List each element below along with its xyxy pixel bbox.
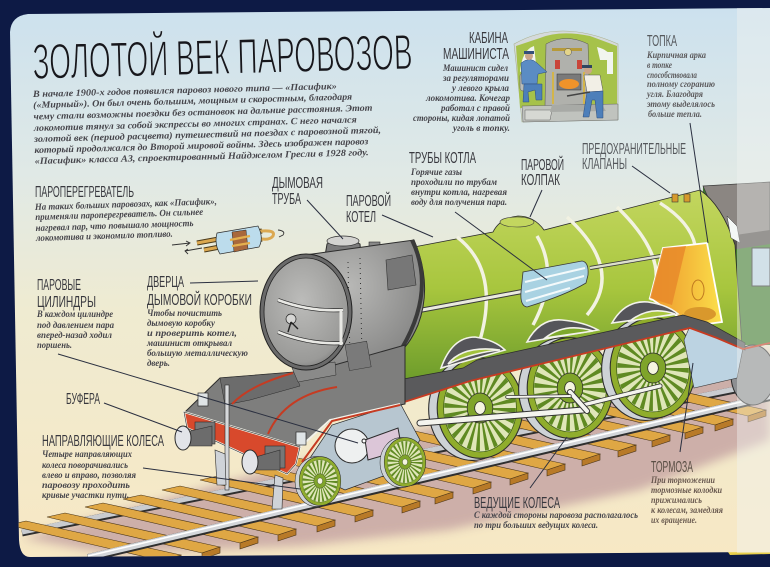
callout: brakes: прижимались: [651, 496, 703, 506]
label: chimney: [272, 175, 323, 208]
label: steam dome: [521, 155, 564, 189]
callout: firebox: ТОПКА: [647, 33, 677, 50]
intro text block: «Пасифик» класса А3, спроектированный Найджелом Гресли в 1928 году.: [35, 147, 369, 167]
callout: driver's cab: [413, 30, 510, 134]
callout: boiler tubes: [409, 150, 507, 208]
label: safety valves: КЛАПАНЫ: [582, 156, 627, 173]
callout: brakes: ТОРМОЗА: [651, 459, 693, 476]
callout: driving wheels: С каждой стороны паровоза располагалось: [474, 510, 639, 521]
label: safety valves: ПРЕДОХРАНИТЕЛЬНЫЕ: [582, 141, 686, 158]
intro text block: [32, 80, 382, 167]
icon: cab interior illustration: [514, 31, 618, 122]
label: safety valves: [582, 141, 686, 173]
callout: superheater: [34, 184, 218, 244]
callout: smokebox door: ДЫМОВОЙ КОРОБКИ: [147, 290, 252, 309]
callout: driver's cab: работал с правой: [440, 103, 510, 114]
translucent right page edge: [737, 8, 770, 553]
boiler tubes cutaway: [521, 261, 588, 307]
callout: firebox: больше тепла.: [648, 109, 702, 120]
callout: driver's cab: за регуляторами: [442, 74, 509, 84]
callout: leading wheels: [42, 433, 164, 501]
label: boiler: [346, 191, 391, 226]
callout: brakes: [650, 459, 723, 526]
callout: leading wheels: колеса поворачивались: [42, 461, 129, 471]
callout: smokebox door: дымовую коробку: [147, 318, 216, 329]
callout: steam cylinders: [36, 277, 114, 351]
intro text block: который продолжался до Второй мировой войны. Здесь изображен паровоз: [34, 136, 369, 156]
steam dome top: [500, 217, 534, 227]
buffers: [175, 426, 280, 474]
callout: leading wheels: НАПРАВЛЯЮЩИЕ КОЛЕСА: [42, 433, 164, 450]
intro text block: золотой век (период расцвета) путешествий на поездах с паровозной тягой,: [33, 125, 381, 145]
firebox cutaway: [650, 243, 722, 326]
chimney: [325, 236, 380, 256]
intro text block: («Мирный»). Он был очень большим, мощным и скоростным, благодаря: [33, 92, 352, 111]
callout: boiler tubes: воду для получения пара.: [411, 197, 507, 208]
label: boiler: КОТЕЛ: [346, 209, 376, 226]
label: boiler: ПАРОВОЙ: [346, 191, 391, 210]
intro text block: В начале 1900-х годов появился паровоз нового типа — «Пасифик»: [32, 81, 337, 100]
callout: driver's cab: уголь в топку.: [452, 124, 510, 134]
callout: boiler tubes: ТРУБЫ КОТЛА: [409, 150, 476, 167]
buffer beam: [184, 385, 300, 509]
pipes: [395, 255, 667, 315]
coupling rods: [420, 386, 660, 423]
boiler: [395, 190, 742, 386]
callout: brakes: тормозные колодки: [651, 485, 722, 496]
label: steam dome: КОЛПАК: [521, 172, 560, 189]
leader lines: [58, 123, 708, 489]
callout: smokebox door: машинист открывал: [146, 339, 232, 349]
back rail: [22, 382, 770, 533]
callout: driver's cab: Машинист сидел: [442, 63, 508, 74]
safety valves: [672, 194, 690, 202]
callout: superheater: локомотива и экономило топливо.: [35, 230, 173, 244]
callout: smokebox door: и проверить котел,: [147, 329, 237, 339]
small leading wheels: [295, 438, 426, 506]
callout: firebox: в топке: [647, 61, 673, 71]
intro text block: локомотив тянул за собой экспрессы во многих странах. С него начался: [33, 115, 357, 134]
callout: smokebox door: большую металлическую: [147, 348, 248, 359]
callout: superheater: применяли пароперегреватель. Он сильнее: [35, 208, 204, 223]
rear driving wheel group: [429, 318, 696, 460]
callout: leading wheels: кривые участки пути.: [42, 491, 129, 501]
smokebox: [298, 240, 425, 372]
callout: firebox: Кирпичная арка: [646, 51, 706, 61]
callout: firebox: угля. Благодаря: [646, 89, 703, 100]
ground ballast: [22, 350, 770, 554]
callout: brakes: При торможении: [650, 476, 715, 486]
rear frame: [684, 326, 743, 388]
callout: leading wheels: влево и вправо, позволяя: [42, 471, 136, 481]
callout: superheater: На таких больших паровозах, как «Пасифик»,: [34, 196, 217, 213]
callout: steam cylinders: В каждом цилиндре: [36, 309, 114, 320]
callout: driver's cab: локомотива. Кочегар: [425, 94, 510, 104]
label: chimney: ТРУБА: [272, 191, 301, 208]
callout: brakes: к колесам, замедляя: [651, 505, 723, 516]
callout: driving wheels: [474, 495, 639, 531]
intro text block: чему стали возможны поездки без остановок на дальние расстояния. Этот: [33, 103, 373, 122]
callout: steam cylinders: поршень.: [37, 341, 72, 351]
callout: firebox: полному сгоранию: [647, 80, 715, 90]
callout: steam cylinders: ПАРОВЫЕ: [37, 277, 81, 294]
callout: leading wheels: паровозу проходить: [42, 480, 131, 491]
callout: smokebox door: [146, 274, 252, 369]
lamps: [198, 393, 306, 445]
callout: firebox: [646, 33, 716, 120]
callout: driver's cab: МАШИНИСТА: [443, 46, 509, 63]
callout: smokebox door: дверь.: [147, 358, 170, 369]
label: steam dome: ПАРОВОЙ: [521, 155, 564, 174]
callout: driver's cab: КАБИНА: [469, 30, 508, 47]
platform: [185, 341, 405, 462]
callout: driving wheels: по три больших ведущих колеса.: [474, 520, 598, 531]
icon: superheater: [172, 226, 284, 254]
cab and tender: [700, 182, 770, 405]
firebox window: [727, 216, 740, 243]
smokebox door: [260, 254, 352, 370]
callout: driving wheels: ВЕДУЩИЕ КОЛЕСА: [474, 495, 560, 512]
callout: smokebox door: Чтобы почистить: [147, 308, 223, 319]
callout: boiler tubes: внутри котла, нагревая: [411, 188, 507, 198]
callout: driver's cab: у левого крыла: [451, 84, 509, 94]
callout: brakes: их вращение.: [651, 516, 697, 526]
title: ЗОЛОТОЙ ВЕК ПАРОВОЗОВ: [32, 23, 413, 90]
cylinder and bogie: [302, 403, 420, 490]
figure: driver: [520, 51, 547, 102]
callout: firebox: этому выделялось: [646, 99, 716, 110]
boiler bands: [457, 203, 695, 340]
callout: superheater: нагревал пар, что повышало мощность: [35, 219, 194, 234]
label: chimney: ДЫМОВАЯ: [272, 175, 323, 192]
label: buffers: БУФЕРА: [66, 391, 100, 408]
callout: smokebox door: ДВЕРЦА: [147, 274, 184, 291]
front rail: [88, 395, 770, 558]
callout: steam cylinders: ЦИЛИНДРЫ: [37, 294, 96, 311]
running plate: [398, 315, 770, 404]
sleepers: [18, 393, 767, 556]
callout: steam cylinders: вперед-назад ходил: [37, 330, 112, 341]
callout: firebox: способствовала: [647, 70, 697, 81]
splashers: [441, 302, 678, 368]
callout: boiler tubes: Горячие газы: [410, 168, 462, 178]
page edge: [728, 549, 770, 555]
callout: driver's cab: стороны, кидая лопатой: [413, 113, 510, 124]
locomotive: [175, 182, 770, 509]
callout: boiler tubes: проходили по трубам: [411, 177, 497, 188]
figure: fireman: [567, 65, 603, 118]
callout: steam cylinders: под давлением пара: [37, 320, 114, 331]
railway track: [18, 387, 770, 557]
callout: superheater: ПАРОПЕРЕГРЕВАТЕЛЬ: [35, 184, 134, 201]
callout: leading wheels: Четыре направляющих: [42, 450, 132, 460]
